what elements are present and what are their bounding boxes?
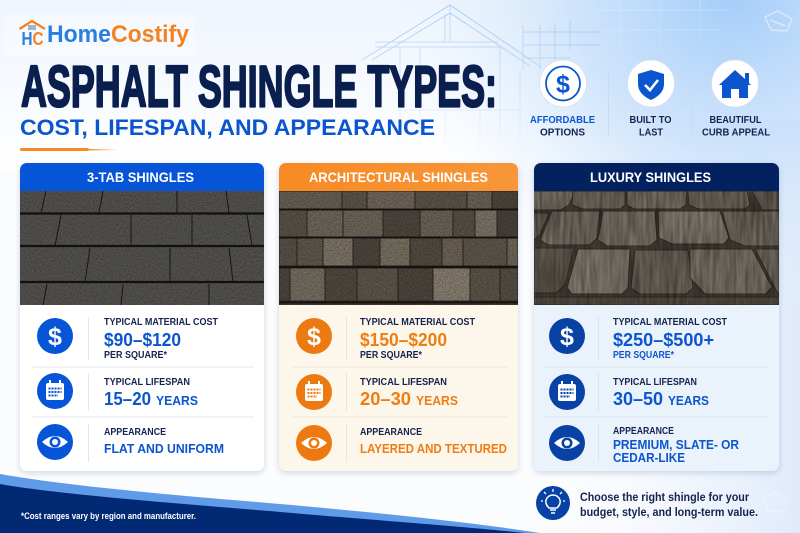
panel: architectural shingles xyxy=(279,163,518,471)
icon: calendar xyxy=(549,374,585,410)
label: TYPICAL LIFESPAN xyxy=(613,377,697,388)
price: $250–$500+ xyxy=(613,330,714,350)
benefit label: BEAUTIFUL xyxy=(710,114,762,126)
benefit: curb appeal xyxy=(702,60,771,138)
photo: flat 3-tab shingles xyxy=(20,191,264,305)
card header: 3-TAB SHINGLES xyxy=(87,170,194,185)
unit: PER SQUARE* xyxy=(104,350,167,361)
logo mark: H xyxy=(22,29,32,49)
photo: slate-like luxury shingles xyxy=(530,191,779,305)
logo mark: C xyxy=(32,29,44,49)
years: 20–30 xyxy=(360,389,411,409)
card header xyxy=(279,163,518,191)
card header xyxy=(534,163,779,191)
icon: eye xyxy=(296,425,332,461)
years: 30–50 xyxy=(613,389,663,409)
row: appearance xyxy=(549,425,740,465)
label: APPEARANCE xyxy=(360,427,422,438)
row: appearance xyxy=(296,425,507,461)
callout text: Choose the right shingle for your xyxy=(580,492,749,504)
years: YEARS xyxy=(416,393,458,408)
label: TYPICAL LIFESPAN xyxy=(104,377,190,388)
years: 15–20 xyxy=(104,389,151,409)
icon: dollar xyxy=(37,318,73,354)
card header: LUXURY SHINGLES xyxy=(590,170,711,185)
value: CEDAR-LIKE xyxy=(613,450,685,465)
row: lifespan xyxy=(296,374,458,410)
years: YEARS xyxy=(668,393,709,408)
logo wordmark: HomeCostify xyxy=(47,21,189,48)
benefit label: OPTIONS xyxy=(540,126,585,138)
benefit label: AFFORDABLE xyxy=(530,114,595,126)
logo mark xyxy=(20,21,45,49)
icon: house xyxy=(712,60,758,107)
footnote: *Cost ranges vary by region and manufacturer. xyxy=(21,511,196,521)
row: lifespan xyxy=(549,374,709,410)
label: TYPICAL MATERIAL COST xyxy=(104,317,218,328)
icon: eye xyxy=(549,425,585,461)
label: TYPICAL MATERIAL COST xyxy=(360,317,475,328)
icon: dollar xyxy=(296,318,332,354)
years: YEARS xyxy=(156,393,198,408)
benefit label: CURB APPEAL xyxy=(702,126,771,138)
card header: ARCHITECTURAL SHINGLES xyxy=(309,170,488,185)
row: appearance xyxy=(37,424,224,460)
icon: dollar xyxy=(549,318,585,354)
row: material cost xyxy=(37,317,218,361)
value: FLAT AND UNIFORM xyxy=(104,441,224,456)
unit: PER SQUARE* xyxy=(613,350,674,361)
benefit label: LAST xyxy=(639,126,664,138)
value: PREMIUM, SLATE- OR xyxy=(613,437,740,452)
callout: choose the right shingle xyxy=(536,486,758,520)
icon: calendar xyxy=(37,373,73,409)
price: $90–$120 xyxy=(104,330,181,350)
card header xyxy=(20,163,264,191)
panel: luxury shingles xyxy=(530,163,779,471)
benefit label: BUILT TO xyxy=(630,114,672,126)
blueprint house illustration xyxy=(362,0,730,150)
icon: dollar: $ xyxy=(560,323,574,351)
label: APPEARANCE xyxy=(613,426,674,437)
label: APPEARANCE xyxy=(104,427,166,438)
benefit: affordable options xyxy=(530,60,595,138)
bottom wave xyxy=(0,474,540,533)
unit: PER SQUARE* xyxy=(360,350,422,361)
photo: layered architectural shingles xyxy=(279,191,518,305)
value: LAYERED AND TEXTURED xyxy=(360,441,507,456)
icon: eye xyxy=(37,424,73,460)
callout text: budget, style, and long-term value. xyxy=(580,507,758,519)
watermark icons xyxy=(763,11,792,512)
label: TYPICAL LIFESPAN xyxy=(360,377,447,388)
benefit: built to last xyxy=(628,60,674,138)
title: ASPHALT SHINGLE TYPES: xyxy=(21,54,497,120)
icon: calendar xyxy=(296,374,332,410)
accent rule xyxy=(20,148,117,151)
icon: shield xyxy=(628,60,674,107)
icon: dollar: $ xyxy=(307,323,321,351)
row: material cost xyxy=(549,317,727,361)
icon: dollar: $ xyxy=(48,323,62,351)
icon: light bulb xyxy=(536,486,570,520)
icon: dollar: $ xyxy=(556,70,570,98)
subtitle: COST, LIFESPAN, AND APPEARANCE xyxy=(20,115,435,140)
row: lifespan xyxy=(37,373,198,409)
panel: 3-tab shingles xyxy=(20,163,264,471)
logo xyxy=(3,14,195,56)
row: material cost xyxy=(296,317,475,361)
label: TYPICAL MATERIAL COST xyxy=(613,317,727,328)
price: $150–$200 xyxy=(360,330,447,350)
